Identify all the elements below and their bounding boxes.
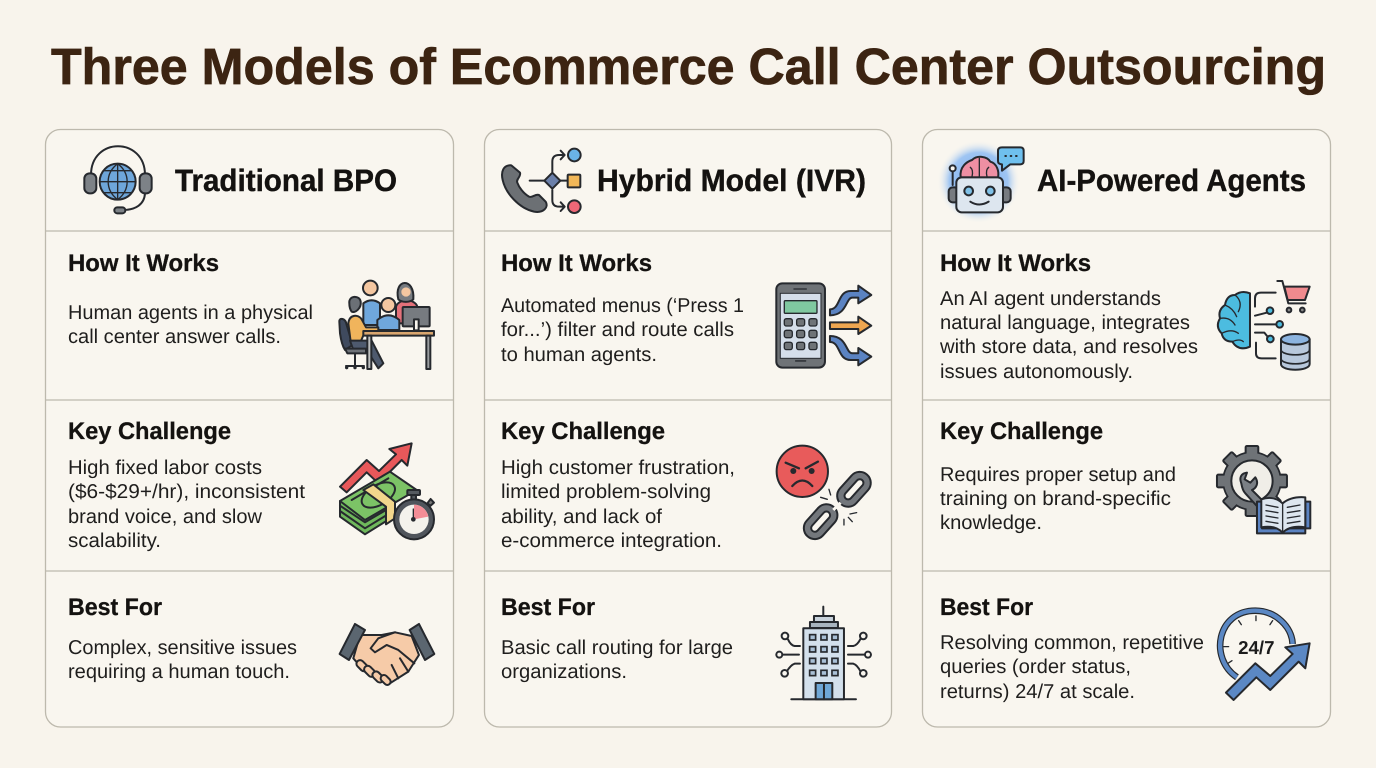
icon: gear, wrench and book	[1217, 446, 1310, 533]
text: key challenge heading: Key Challenge	[68, 418, 231, 445]
icon: handshake	[340, 624, 434, 686]
text: key challenge body: e-commerce integration.	[501, 530, 722, 552]
text: key challenge body	[68, 457, 305, 552]
text: how it works heading: How It Works	[940, 250, 1091, 277]
text: key challenge body: High customer frustration,	[501, 457, 735, 479]
heading: Traditional BPO: Traditional BPO	[175, 163, 397, 198]
icon: AI robot with brain	[937, 140, 1024, 223]
icon: money, rising arrow and stopwatch	[340, 443, 434, 539]
panel: Traditional BPO	[46, 130, 454, 727]
text: how it works body: with store data, and resolves	[939, 336, 1198, 358]
text: how it works body: natural language, integrates	[940, 312, 1190, 334]
text: key challenge body	[940, 464, 1176, 534]
text: how it works body	[68, 302, 313, 348]
text: best for body	[501, 637, 733, 683]
text: key challenge body: limited problem-solving	[501, 481, 711, 503]
icon: angry face and broken chain	[777, 446, 870, 538]
icon: phone keypad with routing arrows	[776, 283, 871, 368]
text: how it works body: for...’) filter and route calls	[501, 319, 734, 341]
text: key challenge body: High fixed labor costs	[68, 457, 262, 479]
text: key challenge body: scalability.	[68, 530, 161, 552]
text: best for body: Resolving common, repetitive	[940, 632, 1204, 654]
text: best for heading: Best For	[940, 594, 1033, 621]
icon: 24/7 clock with rising arrow	[1220, 611, 1310, 700]
text: how it works body: call center answer calls.	[68, 326, 281, 348]
text: how it works body: issues autonomously.	[940, 361, 1133, 383]
text: key challenge body: brand voice, and slow	[68, 506, 263, 528]
panel: AI-Powered Agents	[922, 130, 1330, 727]
text: best for body: requiring a human touch.	[68, 661, 290, 683]
text: best for body: organizations.	[501, 661, 627, 683]
text: how it works body	[501, 295, 744, 366]
text: best for body: returns) 24/7 at scale.	[940, 681, 1135, 703]
icon: 24/7 clock with rising arrow: 24/7	[1238, 637, 1274, 658]
text: best for heading: Best For	[501, 594, 595, 621]
text: key challenge body: ability, and lack of	[501, 506, 662, 528]
text: how it works body: An AI agent understands	[940, 288, 1161, 310]
icon: phone call routing	[502, 149, 581, 213]
text: how it works body	[939, 288, 1198, 383]
text: best for body	[940, 632, 1204, 703]
text: key challenge heading: Key Challenge	[501, 418, 665, 445]
icon: connected office building	[776, 607, 871, 699]
text: how it works heading: How It Works	[501, 250, 652, 277]
text: best for body: queries (order status,	[940, 656, 1131, 678]
text: how it works body: Human agents in a physical	[68, 302, 313, 324]
title: Three Models of Ecommerce Call Center Outsourcing	[51, 38, 1326, 95]
text: how it works body: to human agents.	[501, 344, 657, 366]
text: key challenge heading: Key Challenge	[940, 418, 1103, 445]
text: key challenge body: ($6-$29+/hr), inconsistent	[68, 481, 305, 503]
icon: call center team at desk	[339, 281, 434, 369]
text: key challenge body: knowledge.	[940, 512, 1042, 534]
text: best for body	[68, 637, 297, 683]
text: key challenge body: training on brand-specific	[940, 488, 1171, 510]
text: how it works heading: How It Works	[68, 250, 219, 277]
text: best for body: Basic call routing for large	[501, 637, 733, 659]
text: key challenge body	[501, 457, 735, 552]
icon: AI brain connected to cart and database	[1218, 281, 1310, 370]
panel: Hybrid Model	[484, 130, 892, 727]
text: key challenge body: Requires proper setup and	[940, 464, 1176, 486]
text: how it works body: Automated menus (‘Press 1	[501, 295, 744, 317]
text: best for body: Complex, sensitive issues	[68, 637, 297, 659]
text: best for heading: Best For	[68, 594, 162, 621]
heading: AI-Powered Agents: AI-Powered Agents	[1037, 163, 1306, 198]
heading: Hybrid Model (IVR): Hybrid Model (IVR)	[597, 163, 866, 198]
icon: globe headset	[84, 146, 152, 213]
